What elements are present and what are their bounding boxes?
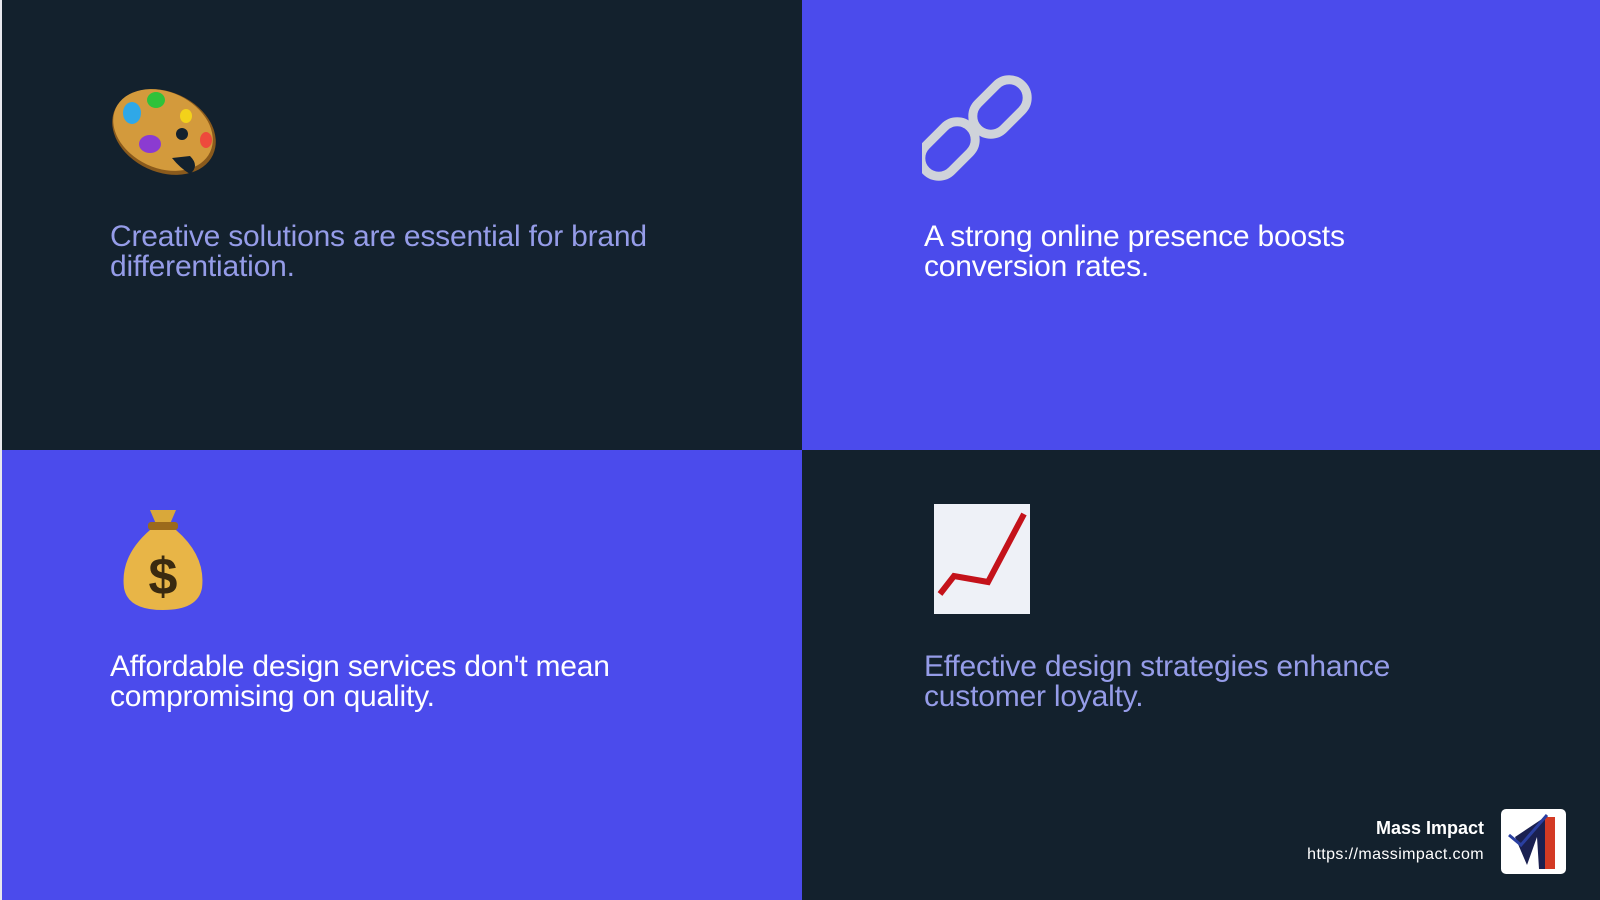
text: creative: Creative solutions are essential for brand differentiation. (110, 220, 647, 283)
panel: online presence (802, 0, 1600, 450)
brand name: Mass Impact (1376, 818, 1484, 838)
icon: chart (934, 504, 1030, 614)
text: strategies: Effective design strategies enhance customer loyalty. (924, 650, 1390, 713)
icon: link (922, 75, 1032, 181)
logo (1501, 809, 1566, 874)
icon: money bag: $ (149, 548, 178, 606)
brand block (1307, 809, 1566, 874)
text: affordable: Affordable design services don't mean compromising on quality. (110, 650, 610, 713)
icon: money bag (124, 510, 202, 610)
panel: design strategies (802, 450, 1600, 900)
panel: creative solutions (2, 0, 802, 450)
icon: palette (112, 89, 216, 175)
text: online presence: A strong online presence boosts conversion rates. (924, 220, 1345, 283)
brand url: https://massimpact.com (1307, 846, 1484, 863)
panel: affordable design (2, 450, 802, 900)
